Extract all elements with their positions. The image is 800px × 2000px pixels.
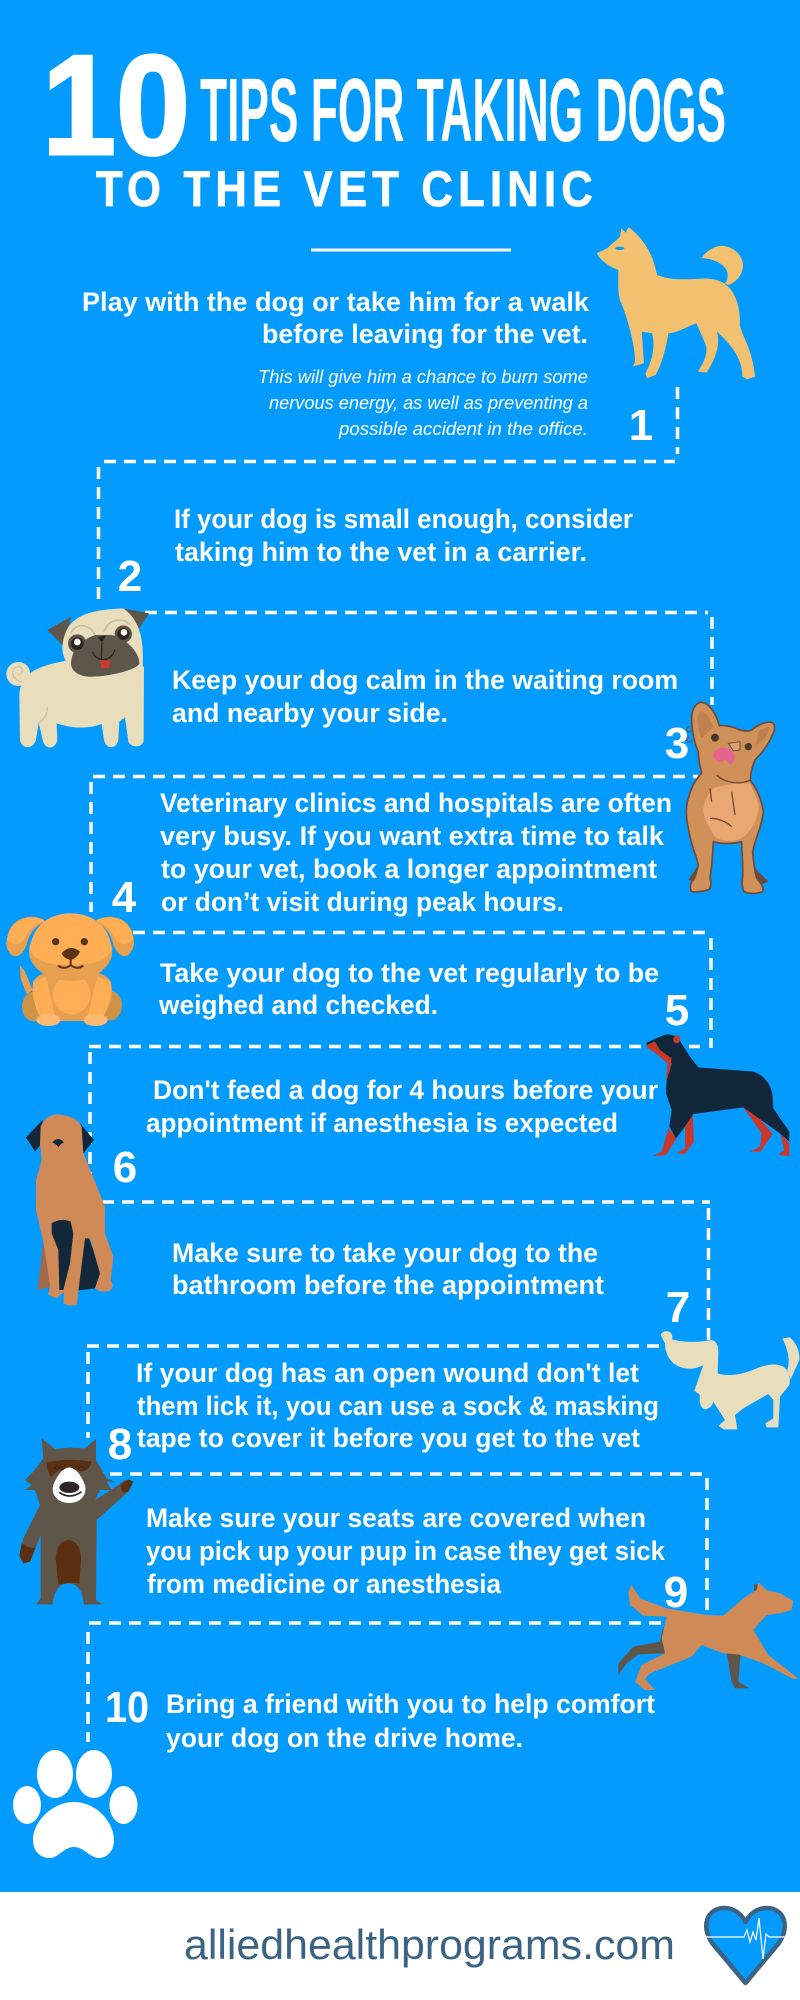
number 2: 2	[118, 552, 142, 601]
icon: tan standing dog	[597, 227, 755, 379]
tip 9 line two: you pick up your pup in case they get sick	[146, 1536, 666, 1566]
tip 9 line three: from medicine or anesthesia	[147, 1569, 502, 1599]
tip 4 line four: or don’t visit during peak hours.	[161, 887, 564, 917]
tip 4 line one: Veterinary clinics and hospitals are often	[160, 788, 672, 818]
icon: french bulldog	[686, 702, 775, 893]
number 5: 5	[665, 986, 689, 1035]
number 10: 10	[105, 1683, 149, 1732]
tip 3 line one: Keep your dog calm in the waiting room	[172, 665, 678, 695]
tip 7 line two: bathroom before the appointment	[172, 1270, 604, 1300]
icon: black and tan rottweiler	[647, 1035, 789, 1156]
footer website: alliedhealthprograms.com	[184, 1921, 675, 1968]
tip 4	[112, 788, 672, 922]
tip 8 line two: them lick it, you can use a sock & masking	[137, 1391, 659, 1421]
tip 5 line two: weighed and checked.	[158, 990, 438, 1020]
tip 7 line one: Make sure to take your dog to the	[172, 1238, 598, 1268]
tip 5 line one: Take your dog to the vet regularly to be	[160, 958, 659, 988]
tip 9 line one: Make sure your seats are covered when	[146, 1503, 646, 1533]
number 9: 9	[664, 1568, 688, 1617]
tip 8 line three: tape to cover it before you get to the vet	[137, 1423, 640, 1453]
number 1: 1	[629, 401, 653, 450]
tip 2 line two: taking him to the vet in a carrier.	[175, 537, 587, 567]
big number 10: 10	[42, 26, 190, 185]
title	[42, 26, 726, 217]
tip 5	[158, 958, 689, 1035]
tip 1 detail line two: nervous energy, as well as preventing a	[269, 393, 588, 413]
tip 6	[113, 1075, 658, 1192]
footer bar	[0, 1892, 800, 2000]
tip 4 line two: very busy. If you want extra time to talk	[160, 821, 665, 851]
icon: grey furry dog waving	[19, 1438, 133, 1604]
number 4: 4	[112, 873, 137, 922]
tip 8	[108, 1358, 659, 1469]
tip 6 line two: appointment if anesthesia is expected	[146, 1108, 618, 1138]
tip 7	[172, 1238, 690, 1332]
tip 6 line one: Don't feed a dog for 4 hours before your	[153, 1075, 658, 1105]
tip 9	[146, 1503, 688, 1617]
tip 3	[172, 665, 689, 768]
tip 8 line one: If your dog has an open wound don't let	[136, 1358, 639, 1388]
number 3: 3	[665, 719, 689, 768]
tip 1 detail line three: possible accident in the office.	[338, 419, 588, 439]
tip 2 line one: If your dog is small enough, consider	[174, 504, 633, 534]
icon: brown seated dog	[26, 1114, 113, 1306]
icon: paw print	[13, 1750, 138, 1858]
number 7: 7	[666, 1283, 690, 1332]
icon: pug	[6, 608, 149, 747]
icon: cream dachshund	[661, 1331, 799, 1429]
tip 10 line two: your dog on the drive home.	[166, 1723, 523, 1753]
tip 3 line two: and nearby your side.	[172, 698, 448, 728]
tip 1 detail line one: This will give him a chance to burn some	[258, 367, 588, 387]
icon: heart with pulse	[705, 1908, 786, 1983]
icon: golden puppy	[6, 913, 134, 1026]
tip 10	[105, 1683, 655, 1753]
number 8: 8	[108, 1420, 132, 1469]
icon: running brown dog	[618, 1582, 798, 1690]
tip 4 line three: to your vet, book a longer appointment	[161, 854, 657, 884]
tip 2	[118, 504, 633, 601]
tip 1 heading: Play with the dog or take him for a walk	[82, 287, 590, 317]
dashed path connecting tips	[87, 387, 712, 1742]
tip 1	[82, 287, 653, 450]
title line two: TO THE VET CLINIC	[96, 161, 598, 217]
tip 10 line one: Bring a friend with you to help comfort	[166, 1689, 655, 1719]
number 6: 6	[113, 1143, 137, 1192]
title underline	[311, 248, 511, 252]
tip 1 heading line two: before leaving for the vet.	[262, 319, 588, 349]
